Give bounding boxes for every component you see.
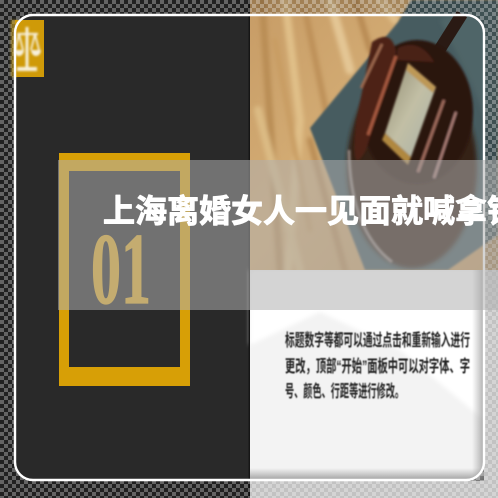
panel: white lower right side bbox=[250, 268, 498, 498]
handle bbox=[436, 11, 467, 52]
wood texture bbox=[250, 0, 498, 270]
slate book block bbox=[310, 0, 498, 270]
translucent title band bbox=[58, 160, 498, 310]
icon: gold scales of justice badge bbox=[11, 20, 44, 77]
image: wooden desk and gavel bbox=[250, 0, 498, 270]
gold number frame bbox=[59, 153, 190, 386]
sounding block bbox=[344, 104, 480, 270]
gavel head bbox=[354, 37, 473, 184]
silver band bbox=[382, 63, 436, 165]
panel: dark left side bbox=[0, 0, 250, 498]
shadow seam between panels bbox=[248, 0, 250, 498]
number 01: 01 bbox=[91, 213, 151, 326]
body text bbox=[285, 330, 470, 401]
